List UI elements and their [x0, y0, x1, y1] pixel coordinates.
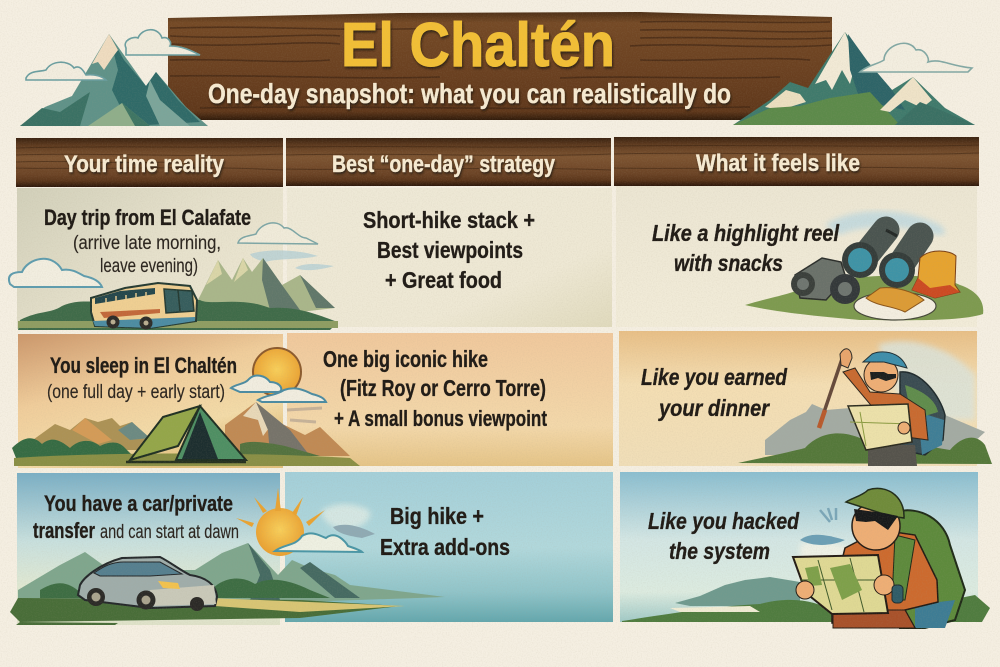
- text: day trip: [44, 205, 251, 277]
- icon: trees: [40, 578, 330, 598]
- icon: sun: [253, 348, 301, 396]
- hands and watch: [796, 581, 814, 599]
- icon: distant hills: [675, 577, 800, 606]
- cell: big hike: [285, 472, 613, 622]
- header: what it feels like: What it feels like: [696, 150, 860, 177]
- icon: hiker with large map: [793, 488, 965, 628]
- header: best one-day strategy: [286, 138, 611, 186]
- map: [848, 404, 912, 450]
- table header row: [16, 137, 979, 187]
- title plank: [168, 11, 832, 120]
- icon: cloud left: [9, 259, 102, 287]
- icon: sun and rays: [236, 488, 325, 556]
- text: day trip: leave evening): [100, 256, 198, 277]
- icon: haze streaks: [287, 408, 322, 422]
- text: you have a car: You have a car/private: [44, 491, 233, 516]
- cell: earned your dinner: [619, 331, 992, 466]
- cell: day trip from El Calafate: [9, 188, 338, 330]
- icon: hiker with map: [819, 349, 945, 466]
- header: your time reality: Your time reality: [64, 151, 225, 178]
- icon: trees and ground: [12, 438, 360, 466]
- icon: grey mountains: [765, 404, 985, 455]
- row 1: day trip: [9, 186, 983, 330]
- text: highlight reel: [652, 220, 840, 276]
- backpack: [900, 372, 945, 455]
- text: day trip: (arrive late morning,: [73, 233, 221, 254]
- icon: distant mountains: [30, 418, 150, 450]
- row 2: sleep in El Chaltén: [12, 331, 992, 468]
- text: earned dinner: [641, 364, 788, 421]
- title text: El Chaltén: [341, 11, 615, 80]
- icon: clouds: [231, 376, 326, 402]
- cloud lower: [26, 62, 106, 80]
- torso and arms: [832, 530, 938, 628]
- map: [793, 555, 888, 614]
- icon: shore and bushes: [622, 600, 840, 622]
- text: you have a car: and can start at dawn: [100, 522, 239, 543]
- text: you sleep: (one full day + early start): [47, 382, 225, 403]
- icon: bushes: [738, 433, 992, 464]
- body and arm: [843, 368, 928, 440]
- head: [852, 502, 900, 550]
- icon: car: [78, 557, 217, 611]
- cell: highlight reel: [616, 186, 983, 327]
- text: hacked the system: Like you hacked: [648, 508, 800, 534]
- text: highlight reel: Like a highlight reel: [652, 220, 840, 246]
- cell: one big iconic hike: [287, 333, 613, 466]
- text: hacked the system: [648, 508, 800, 564]
- icon: sun cloud: [275, 533, 362, 552]
- cell: short-hike stack: Best viewpoints: [377, 237, 523, 263]
- icon: cloud right: [238, 223, 318, 244]
- cell: one big iconic hike: (Fitz Roy or Cerro Torre): [340, 375, 546, 401]
- text: you have a car: [33, 491, 239, 543]
- icon: right mountains and cloud: [733, 32, 975, 125]
- cell: short-hike stack: + Great food: [385, 267, 502, 293]
- backpack: [895, 510, 965, 628]
- icon: tree line and ground: [18, 300, 338, 330]
- text: hacked the system: the system: [669, 538, 770, 564]
- icon: grass: [745, 276, 983, 320]
- cell: one big iconic hike: One big iconic hike: [323, 346, 488, 372]
- icon: plate and toast: [854, 288, 936, 320]
- icon: big mountain: [225, 402, 350, 456]
- header: what it feels like: [614, 137, 979, 186]
- cell: you sleep: [12, 334, 360, 468]
- header: your time reality: [16, 138, 283, 187]
- text: earned dinner: Like you earned: [641, 364, 788, 390]
- row 3: car or private transfer: [10, 472, 990, 628]
- text: day trip: Day trip from El Calafate: [44, 205, 251, 230]
- cell: hacked the system: [620, 472, 990, 628]
- cloud upper: [125, 30, 200, 55]
- cell: big hike: Big hike +: [390, 503, 484, 529]
- icon: left mountains and clouds: [20, 30, 208, 126]
- icon: ground: [10, 598, 400, 622]
- cell: one big iconic hike: + A small bonus viewpoint: [334, 406, 548, 431]
- text: highlight reel: with snacks: [674, 250, 783, 276]
- icon: blue wisps: [250, 250, 334, 270]
- text: you have a car: transfer: [33, 518, 95, 543]
- text: you sleep: You sleep in El Chaltén: [50, 353, 237, 378]
- icon: binoculars: [791, 230, 920, 304]
- head: [864, 358, 898, 392]
- cell: short-hike stack: [287, 188, 612, 327]
- icon: mountains: [195, 258, 335, 312]
- text: you sleep: [47, 353, 237, 403]
- icon: background mountains: [18, 543, 445, 602]
- text: earned dinner: your dinner: [658, 395, 770, 421]
- cell: short-hike stack: Short-hike stack +: [363, 207, 535, 233]
- icon: snack pouch: [912, 251, 960, 298]
- icon: tent: [126, 406, 246, 462]
- cell: big hike: Extra add-ons: [380, 534, 510, 560]
- subtitle: One-day snapshot: what you can realistically do: [208, 78, 731, 109]
- header: best one-day strategy: Best “one-day” strategy: [332, 151, 556, 178]
- cell: you have a car: [10, 473, 445, 625]
- icon: bus: [91, 283, 197, 330]
